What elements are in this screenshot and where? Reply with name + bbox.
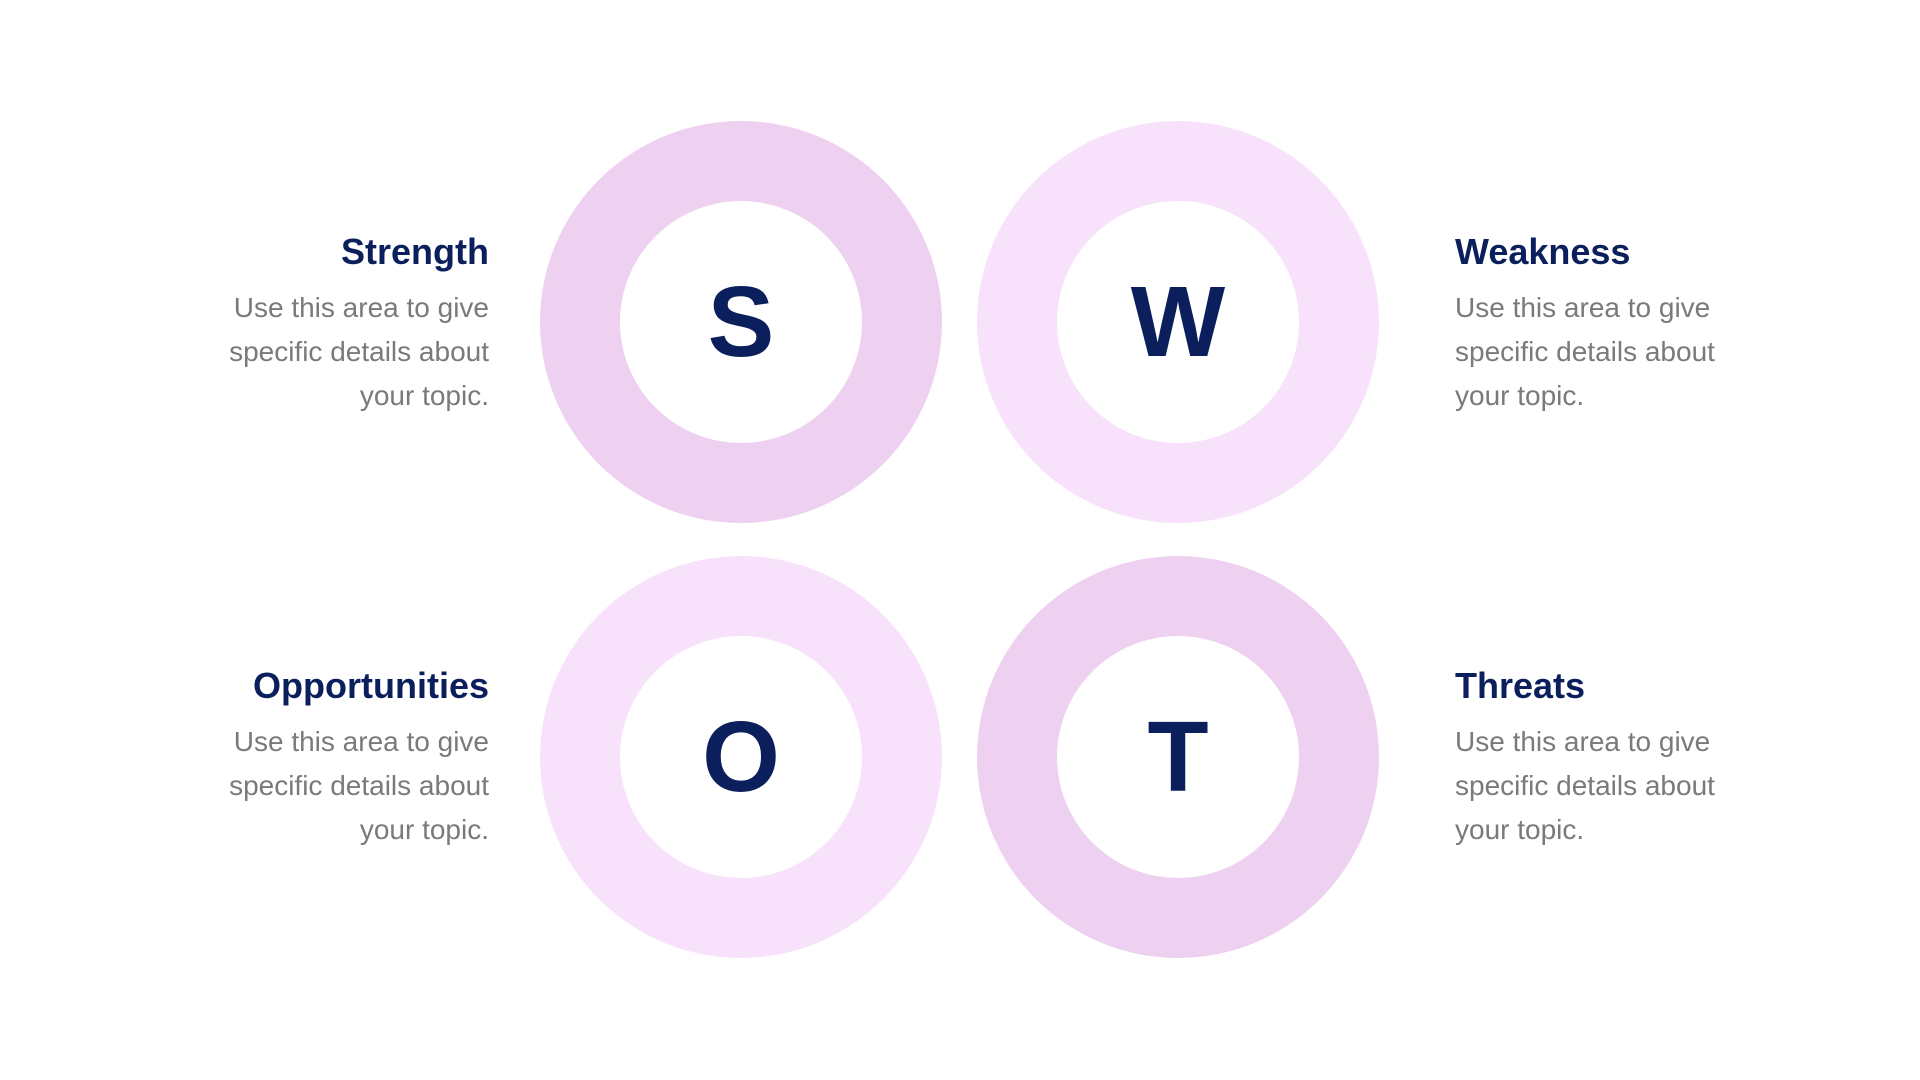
text: Threats: Use this area to give specific details about your topic. bbox=[1455, 726, 1715, 845]
text: Opportunities bbox=[229, 665, 489, 845]
ring: S bbox=[540, 121, 942, 523]
text: Opportunities: Use this area to give specific details about your topic. bbox=[229, 726, 489, 845]
ring: S: S bbox=[708, 266, 774, 378]
text: Strength: Strength bbox=[341, 231, 489, 272]
text: Threats bbox=[1455, 665, 1715, 845]
text: Threats: Threats bbox=[1455, 665, 1585, 706]
text: Weakness bbox=[1455, 231, 1715, 411]
ring: W: W bbox=[1131, 266, 1225, 378]
text: Opportunities: Opportunities bbox=[253, 665, 489, 706]
ring: T: T bbox=[1147, 700, 1209, 812]
text: Weakness: Weakness bbox=[1455, 231, 1630, 272]
ring: W bbox=[977, 121, 1379, 523]
ring: O: O bbox=[702, 700, 780, 812]
ring: O bbox=[540, 556, 942, 958]
text: Strength: Use this area to give specific details about your topic. bbox=[229, 292, 489, 411]
text: Weakness: Use this area to give specific details about your topic. bbox=[1455, 292, 1715, 411]
ring: T bbox=[977, 556, 1379, 958]
text: Strength bbox=[229, 231, 489, 411]
